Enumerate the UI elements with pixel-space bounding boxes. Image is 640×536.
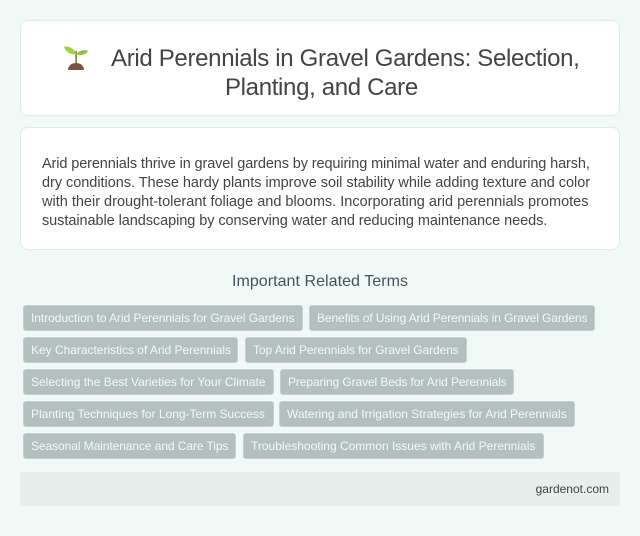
tag	[279, 401, 575, 427]
footer source: gardenot.com	[536, 482, 609, 496]
tag: Selecting the Best Varieties for Your Climate	[31, 375, 266, 389]
tag	[245, 337, 467, 363]
tag: Watering and Irrigation Strategies for Arid Perennials	[287, 407, 567, 421]
icon: seedling	[64, 46, 88, 70]
tag	[23, 369, 274, 395]
intro paragraph: sustainable landscaping by conserving water and reducing maintenance needs.	[42, 213, 547, 229]
tag	[243, 433, 544, 459]
title: Planting, and Care	[225, 74, 418, 101]
title: Arid Perennials in Gravel Gardens: Selection,	[111, 45, 580, 72]
related terms tag list	[23, 305, 595, 459]
intro text panel	[20, 127, 620, 250]
tag: Benefits of Using Arid Perennials in Gravel Gardens	[317, 311, 587, 325]
tag: Top Arid Perennials for Gravel Gardens	[253, 343, 459, 357]
intro paragraph: with their drought-tolerant foliage and blooms. Incorporating arid perennials promotes	[42, 194, 588, 210]
tag: Key Characteristics of Arid Perennials	[31, 343, 231, 357]
tag	[23, 433, 236, 459]
intro paragraph: dry conditions. These hardy plants improve soil stability while adding texture and color	[42, 175, 590, 191]
tag	[23, 305, 303, 331]
tag	[23, 401, 274, 427]
tag: Seasonal Maintenance and Care Tips	[31, 439, 228, 453]
footer bar	[20, 472, 620, 506]
header panel	[20, 20, 620, 116]
tag	[280, 369, 514, 395]
tag: Introduction to Arid Perennials for Gravel Gardens	[31, 311, 294, 325]
related terms heading: Important Related Terms	[232, 273, 408, 290]
tag	[309, 305, 595, 331]
intro paragraph	[42, 156, 590, 229]
tag: Planting Techniques for Long-Term Success	[31, 407, 265, 421]
tag	[23, 337, 238, 363]
title	[111, 45, 580, 101]
tag: Preparing Gravel Beds for Arid Perennials	[288, 375, 507, 389]
intro paragraph: Arid perennials thrive in gravel gardens by requiring minimal water and enduring harsh,	[42, 156, 590, 172]
tag: Troubleshooting Common Issues with Arid Perennials	[251, 439, 535, 453]
